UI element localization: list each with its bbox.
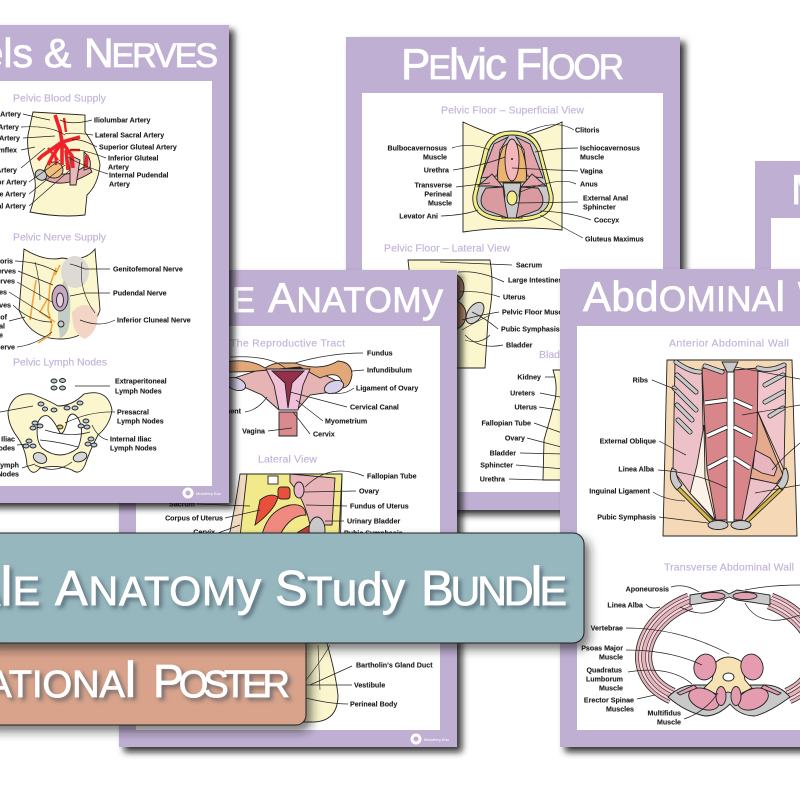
labels: lateral view bbox=[440, 262, 572, 350]
poster title: Female Anatomy: E bbox=[232, 281, 255, 320]
labels: lateral view of pelvis: Urinary Bladder bbox=[347, 518, 400, 526]
labels: pelvic blood supply: Inferior Gluteal bbox=[108, 154, 158, 162]
labels: superficial view: Clitoris bbox=[575, 126, 599, 134]
labels: superficial view: Levator Ani bbox=[399, 212, 438, 220]
labels: transverse abdominal wall: Muscle bbox=[599, 654, 623, 662]
labels: pelvic nerve supply: Pudendal Nerve bbox=[113, 290, 167, 298]
logo: Midwifery.Edu: Midwifery.Edu bbox=[196, 491, 221, 496]
labels: superficial view: Gluteus Maximus bbox=[585, 236, 644, 244]
labels: anterior abdominal wall: Pubic Symphasis bbox=[597, 514, 656, 522]
labels: anterior abdominal wall: Ribs bbox=[633, 376, 648, 384]
labels: superficial view: Anus bbox=[580, 180, 598, 188]
labels: reproductive tract: Cervical Canal bbox=[350, 404, 399, 412]
labels: pelvic blood supply: Iliolumbar Artery bbox=[94, 116, 151, 124]
logo: Midwifery.Edu bbox=[182, 488, 221, 498]
labels: transverse abdominal wall: Muscles bbox=[606, 706, 634, 714]
labels: lateral view of pelvis: Cervix bbox=[193, 528, 215, 536]
diagram: pelvic blood supply bbox=[28, 112, 100, 216]
labels: pelvic nerve supply: of bbox=[0, 314, 8, 322]
heading: anterior abdominal wall: Anterior Abdominal Wall bbox=[669, 338, 789, 350]
labels: pelvic blood supply: Artery bbox=[108, 164, 129, 172]
poster: Pelvic Floor bbox=[346, 37, 680, 510]
heading: pelvic lymph nodes: Pelvic Lymph Nodes bbox=[13, 356, 107, 368]
labels: superficial view: Vagina bbox=[580, 168, 603, 176]
poster title: Abdominal Wall: AbdOMINAl bbox=[583, 273, 785, 320]
heading: superficial view: Pelvic Floor – Superficial View bbox=[441, 104, 584, 116]
labels: vulva lower section: Perineal Body bbox=[350, 700, 397, 708]
diagram: vulva lower section bbox=[295, 640, 338, 722]
labels: pelvic nerve supply bbox=[0, 258, 191, 352]
banner text: Female Anatomy Study Bundle: ANATOMy bbox=[55, 562, 261, 616]
banner text: Female Anatomy Study Bundle: BUNDlE bbox=[421, 555, 567, 617]
labels: lateral view: Uterus bbox=[503, 294, 526, 302]
diagram: anterior abdominal wall bbox=[663, 360, 797, 536]
poster title: Vessels and Nerves bbox=[0, 30, 218, 76]
labels: anterior abdominal wall: Linea Alba bbox=[618, 466, 654, 474]
labels: superficial view: Perineal bbox=[424, 190, 452, 198]
labels: pelvic lymph nodes: Internal Iliac bbox=[110, 436, 151, 444]
labels: superficial view: Muscle bbox=[580, 154, 604, 162]
labels: superficial view: Transverse bbox=[415, 182, 452, 190]
labels: bladder: Kidney bbox=[517, 374, 541, 382]
labels: anterior abdominal wall: Inguinal Ligament bbox=[589, 488, 651, 496]
labels: transverse abdominal wall: Lumborum bbox=[586, 676, 623, 684]
labels: lateral view of pelvis: Fundus of Uterus bbox=[350, 502, 409, 510]
labels: transverse abdominal wall bbox=[581, 585, 800, 726]
labels: transverse abdominal wall: Quadratus bbox=[587, 666, 622, 674]
banner: Female Anatomy Study Bundle bbox=[0, 533, 584, 643]
labels: pelvic blood supply: Artery bbox=[109, 180, 130, 188]
labels: pelvic blood supply bbox=[0, 110, 177, 210]
diagram: pelvic floor superficial view bbox=[463, 122, 562, 232]
heading: pelvic blood supply: Pelvic Blood Supply bbox=[13, 92, 107, 104]
labels: anterior abdominal wall: External Oblique bbox=[600, 438, 656, 446]
labels: transverse abdominal wall: Psoas Major bbox=[581, 644, 623, 652]
logo: Midwifery.Edu bbox=[410, 734, 449, 744]
labels: transverse abdominal wall: Muscle bbox=[599, 684, 623, 692]
poster title: Female Anatomy: ANATOMy bbox=[268, 274, 443, 321]
labels: pelvic lymph nodes: Lymph Nodes bbox=[115, 388, 162, 396]
logo: Midwifery.Edu: Midwifery.Edu bbox=[424, 737, 449, 742]
labels: lateral view of pelvis bbox=[165, 471, 417, 538]
labels: transverse abdominal wall: Vertebrae bbox=[591, 624, 623, 632]
banner text: Female Anatomy Study Bundle bbox=[0, 555, 567, 617]
poster: Vessels and Nerves bbox=[0, 25, 229, 503]
heading: lateral view: Lateral View bbox=[258, 454, 317, 466]
labels: superficial view bbox=[387, 125, 644, 244]
labels: transverse abdominal wall: Linea Alba bbox=[607, 602, 643, 610]
labels: lateral view of pelvis: Fallopian Tube bbox=[367, 472, 417, 480]
labels: superficial view: External Anal bbox=[583, 194, 628, 202]
diagram: reproductive tract bbox=[225, 361, 352, 436]
labels: superficial view: Sphincter bbox=[583, 204, 616, 212]
labels: bladder: Urethra bbox=[480, 476, 505, 484]
banner text: Educational Poster: POSTER bbox=[153, 655, 290, 707]
labels: vulva lower section bbox=[306, 662, 433, 708]
labels: vulva lower section: Bartholin's Gland Duct bbox=[356, 662, 433, 670]
labels: lateral view: Large Intestines bbox=[508, 276, 562, 284]
diagram: lateral view of pelvis bbox=[224, 474, 342, 560]
labels: superficial view: Coccyx bbox=[594, 216, 619, 224]
labels: pelvic lymph nodes: Presacral bbox=[117, 408, 149, 416]
labels: pelvic lymph nodes: Extraperitoneal bbox=[115, 378, 167, 386]
diagram: transverse abdominal wall bbox=[644, 590, 800, 716]
poster: Female Anatomy bbox=[119, 270, 457, 747]
labels: pelvic blood supply: Lateral Sacral Artery bbox=[95, 132, 164, 140]
labels: transverse abdominal wall: Multifidus bbox=[648, 710, 681, 718]
labels: bladder bbox=[480, 374, 565, 484]
banner: Educational Poster bbox=[0, 630, 306, 725]
labels: reproductive tract: Cervix bbox=[313, 430, 335, 438]
labels: pelvic nerve supply: Genitofemoral Nerve bbox=[113, 266, 183, 274]
heading: transverse abdominal wall: Transverse Abdominal Wall bbox=[664, 562, 794, 574]
labels: vulva lower section: Vestibule bbox=[354, 682, 385, 690]
labels: superficial view: Bulbocavernosus bbox=[387, 144, 447, 152]
labels: bladder: Ovary bbox=[505, 434, 525, 442]
labels: lateral view of pelvis: Corpus of Uterus bbox=[165, 514, 223, 522]
labels: pelvic nerve supply: Inferior Cluneal Nerve bbox=[117, 316, 191, 324]
labels: superficial view: Ischiocavernosus bbox=[580, 144, 640, 152]
banner text: Female Anatomy Study Bundle: STudy bbox=[275, 562, 405, 616]
labels: bladder: Fallopian Tube bbox=[481, 420, 531, 428]
labels: lateral view: Pelvic Floor Muscles bbox=[502, 308, 572, 316]
heading: bladder: Bladder bbox=[539, 349, 576, 361]
labels: reproductive tract: Vagina bbox=[242, 428, 265, 436]
labels: anterior abdominal wall bbox=[589, 367, 800, 523]
banner text: Educational Poster bbox=[0, 652, 290, 708]
diagram: pelvic floor lateral view bbox=[408, 260, 492, 368]
poster title: Vessels and Nerves: NERVES bbox=[84, 30, 218, 76]
labels: reproductive tract: Broad Ligament bbox=[187, 408, 242, 416]
labels: reproductive tract: Myometrium bbox=[325, 418, 367, 426]
heading: lateral view: Pelvic Floor – Lateral View bbox=[384, 242, 510, 254]
labels: bladder: Uterus bbox=[515, 404, 537, 412]
labels: reproductive tract: Fundus bbox=[367, 350, 393, 358]
diagram: pelvic nerve supply bbox=[19, 249, 100, 343]
labels: transverse abdominal wall: Aponeurosis bbox=[626, 586, 669, 594]
heading: reproductive tract: The Reproductive Tract bbox=[230, 338, 345, 350]
diagram: bladder bbox=[543, 370, 600, 480]
poster: back right poster bbox=[755, 161, 800, 291]
labels: lateral view of pelvis: Ovary bbox=[359, 488, 379, 496]
labels: bladder: Bladder bbox=[490, 450, 516, 458]
labels: pelvic blood supply: Internal Pudendal bbox=[109, 172, 169, 180]
labels: pelvic lymph nodes: Lymph Nodes bbox=[110, 444, 157, 452]
labels: superficial view: Muscle bbox=[423, 154, 447, 162]
labels: bladder: Ureters bbox=[510, 390, 535, 398]
poster title: Pelvic Floor: PElvic FlOOR bbox=[401, 40, 624, 89]
labels: lateral view: Sacrum bbox=[516, 262, 542, 270]
labels: lateral view of pelvis: Sacrum bbox=[169, 500, 195, 508]
labels: transverse abdominal wall: Muscle bbox=[657, 718, 681, 726]
labels: lateral view: Pubic Symphasis bbox=[501, 326, 560, 334]
labels: pelvic lymph nodes: Lymph Nodes bbox=[117, 418, 164, 426]
labels: lateral view: Bladder bbox=[506, 342, 533, 350]
labels: lateral view of pelvis: Pubic Symphasis bbox=[344, 530, 403, 538]
poster: Abdominal Wall bbox=[560, 269, 800, 747]
heading: pelvic nerve supply: Pelvic Nerve Supply bbox=[13, 232, 107, 244]
labels: reproductive tract: Infundibulum bbox=[367, 366, 412, 374]
labels: pelvic lymph nodes bbox=[0, 378, 167, 478]
poster title: Vessels and Nerves: & bbox=[44, 30, 71, 76]
labels: reproductive tract: Ligament of Ovary bbox=[356, 384, 418, 392]
diagram: pelvic lymph nodes bbox=[8, 378, 112, 472]
labels: superficial view: Urethra bbox=[424, 166, 449, 174]
labels: transverse abdominal wall: Erector Spinae bbox=[584, 696, 634, 704]
labels: reproductive tract bbox=[187, 350, 418, 438]
labels: pelvic blood supply: Superior Gluteal Artery bbox=[99, 144, 177, 152]
labels: bladder: Sphincter bbox=[480, 462, 513, 470]
labels: superficial view: Muscle bbox=[428, 200, 452, 208]
